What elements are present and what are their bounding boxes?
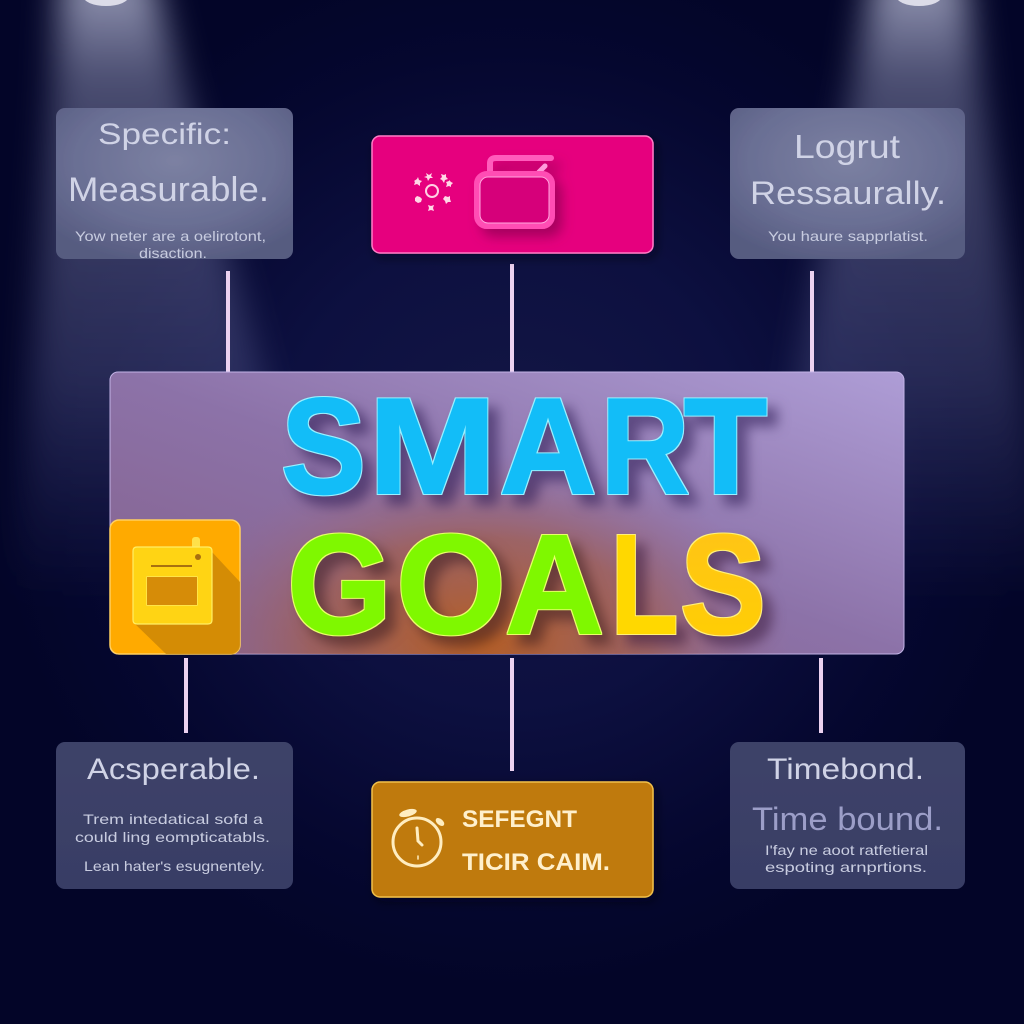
title: GOALS: A [506,505,604,663]
panel: central title card [110,370,904,663]
heading: time bound: Time bound. [752,801,943,837]
title: GOALS: O [396,505,506,663]
description: timebond line two: espoting arnprtions. [765,859,927,875]
heading: logrut: Logrut [794,128,900,165]
spotlight: left [15,0,325,600]
connector lines [184,264,823,771]
title: SMART: M [368,370,496,522]
title: SMART: S [282,370,366,522]
icon: folder [477,158,552,226]
panel: pink icon card [372,136,653,253]
panel: acsperable [56,742,293,889]
title: SMART: T [684,370,767,522]
title: SMART: A [500,370,596,522]
icon: stopwatch [393,807,446,866]
spotlight: right [755,0,1024,600]
title: GOALS: S [680,505,766,663]
panel: logrut / ressaurally [730,108,965,259]
description: specific: Yow neter are a oelirotont, [75,228,266,244]
heading: ressaurally: Ressaurally. [750,175,946,211]
description: specific line two: disaction. [139,245,207,261]
label: ticir caim: TICIR CAIM. [462,849,610,876]
description: acsperable: Trem intedatical sofd a [83,811,263,827]
panel: specific / measurable [56,108,293,261]
panel: gold timer card [372,782,653,897]
description: timebond: I'fay ne aoot ratfetieral [765,842,928,858]
heading: timebond: Timebond. [767,753,924,786]
title: GOALS: G [288,505,392,663]
icon: sparkle ring [414,173,453,211]
heading: measurable: Measurable. [68,171,269,209]
panel: timebond [730,742,965,889]
title: SMART [282,370,767,522]
label: sefegnt: SEFEGNT [462,806,577,833]
title: GOALS: L [611,505,678,663]
heading: specific: Specific: [98,118,231,151]
title: SMART: R [601,370,689,522]
title: GOALS [288,505,766,663]
description: acsperable line three: Lean hater's esugnentely. [84,858,265,874]
description: logrut: You haure sapprlatist. [768,228,928,244]
icon shadow [133,552,240,654]
description: acsperable line two: could ling eompticatabls. [75,829,270,845]
icon card: orange calendar [110,520,240,654]
icon: calendar [133,537,212,624]
heading: acsperable: Acsperable. [87,753,260,786]
